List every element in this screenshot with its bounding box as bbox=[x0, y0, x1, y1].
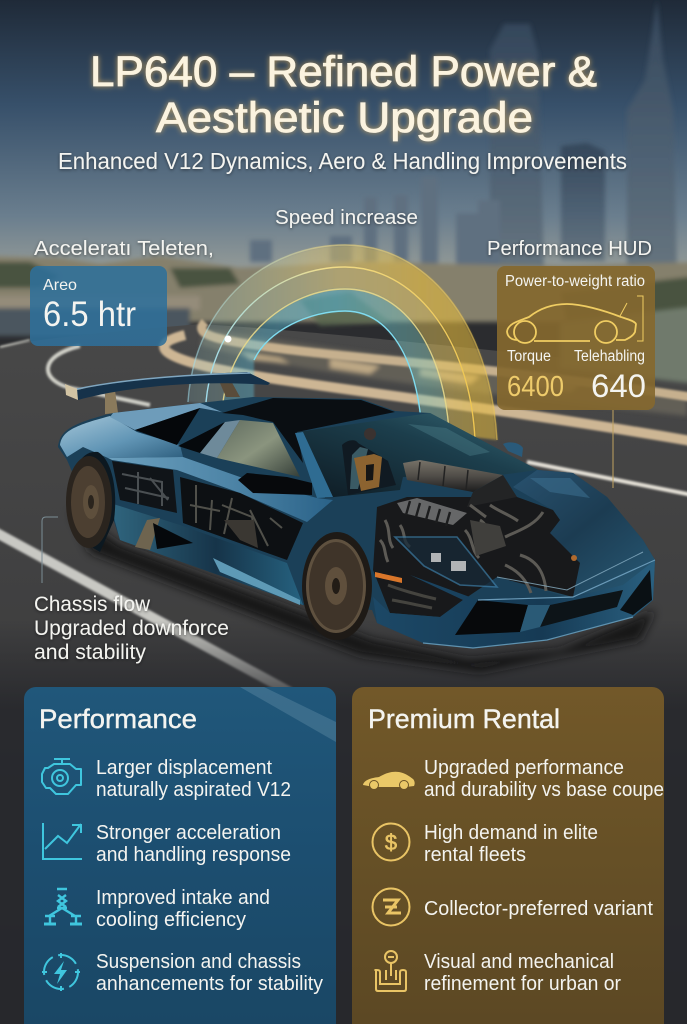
text: and durability vs base coupe bbox=[424, 779, 664, 801]
rear wing bbox=[65, 372, 270, 414]
engine bay bbox=[373, 497, 580, 617]
icon: dollar coin: $ bbox=[385, 830, 397, 855]
front fascia bbox=[373, 552, 655, 648]
icon: collector emblem bbox=[372, 888, 410, 926]
callout bracket bbox=[42, 517, 58, 583]
text: and handling response bbox=[96, 844, 291, 866]
text bbox=[424, 951, 621, 995]
subtitle: Enhanced V12 Dynamics, Aero & Handling Improvements bbox=[58, 148, 627, 174]
icon: rising chart bbox=[43, 823, 82, 859]
hood glass bbox=[497, 470, 655, 597]
A pillar bbox=[295, 432, 333, 498]
aero label: Areo bbox=[43, 277, 77, 294]
text: Stronger acceleration bbox=[96, 822, 281, 844]
outer gold band bbox=[188, 245, 497, 440]
hood highlight bbox=[530, 478, 590, 498]
item: high demand bbox=[372, 822, 598, 866]
torque value: 6400 bbox=[507, 371, 564, 403]
text: cooling efficiency bbox=[96, 909, 246, 931]
upper deck strip bbox=[110, 403, 222, 430]
label: speed increase: Speed increase bbox=[275, 206, 418, 229]
car body base bbox=[58, 397, 655, 648]
panel: performance HUD bbox=[497, 266, 655, 410]
side mirror bbox=[238, 473, 312, 495]
rear wheel bbox=[66, 452, 115, 552]
rear window bbox=[135, 408, 200, 445]
inner cyan band bbox=[223, 289, 449, 430]
text: refinement for urban or bbox=[424, 973, 621, 995]
icon: bolt in ring bbox=[42, 953, 80, 991]
text bbox=[96, 822, 291, 866]
text bbox=[96, 757, 291, 801]
text: Improved intake and bbox=[96, 887, 270, 909]
torque label: Torque bbox=[507, 348, 551, 365]
icon: car bbox=[363, 772, 415, 790]
text: Larger displacement bbox=[96, 757, 272, 779]
text: High demand in elite bbox=[424, 822, 598, 844]
title: LP640 – Refined Power & bbox=[90, 48, 597, 96]
side vent shadow bbox=[153, 523, 193, 549]
car shadow bbox=[70, 510, 655, 672]
icon: dollar coin bbox=[372, 824, 410, 860]
item: stronger acceleration bbox=[43, 822, 291, 866]
side window bbox=[217, 420, 300, 477]
upper side panel bbox=[108, 457, 333, 522]
power value: 640 bbox=[591, 368, 646, 404]
icon: gear shifter bbox=[375, 951, 406, 991]
icon: car outline bbox=[507, 296, 643, 343]
sill highlight bbox=[213, 558, 300, 605]
windshield bbox=[297, 413, 538, 498]
engine details bbox=[375, 460, 577, 608]
driver seat bbox=[342, 428, 396, 495]
title bbox=[90, 48, 597, 142]
text bbox=[96, 951, 323, 995]
front wheel bbox=[302, 532, 372, 640]
text: Upgraded performance bbox=[424, 757, 624, 779]
cutaway mid section bbox=[180, 477, 303, 560]
door pillar bbox=[200, 420, 240, 458]
callout text: Upgraded downforce bbox=[34, 617, 229, 640]
text: rental fleets bbox=[424, 844, 526, 866]
text bbox=[96, 887, 270, 931]
icon: engine bbox=[42, 759, 81, 794]
item: upgraded performance bbox=[363, 757, 664, 801]
item: collector preferred bbox=[372, 888, 653, 926]
label: acceleration telemetry: Acceleratı Teleten, bbox=[34, 238, 214, 260]
item: visual and mechanical bbox=[375, 951, 621, 995]
wing mirror bbox=[503, 442, 523, 457]
panel: premium rental bbox=[352, 687, 664, 1024]
windshield reflection bbox=[408, 424, 490, 456]
HUD leader line bbox=[612, 410, 614, 488]
cutaway rear section bbox=[112, 461, 177, 513]
text bbox=[424, 757, 664, 801]
panel: performance bbox=[24, 687, 336, 1024]
HUD heading: Power-to-weight ratio bbox=[505, 273, 645, 290]
text: naturally aspirated V12 bbox=[96, 779, 291, 801]
quarter window bbox=[178, 422, 225, 453]
callout text: Chassis flow bbox=[34, 593, 151, 616]
speed increase arcs bbox=[188, 245, 497, 440]
performance heading: Performance bbox=[39, 704, 197, 734]
label: performance HUD: Performance HUD bbox=[487, 238, 652, 260]
callout text bbox=[34, 593, 229, 664]
text bbox=[424, 822, 598, 866]
icon: intake manifold bbox=[44, 889, 82, 924]
aero value: 6.5 htr bbox=[43, 295, 136, 334]
chassis details bbox=[122, 472, 282, 548]
car illustration bbox=[58, 372, 655, 672]
text: Suspension and chassis bbox=[96, 951, 301, 973]
item: improved intake bbox=[44, 887, 270, 931]
text: Visual and mechanical bbox=[424, 951, 614, 973]
rear side vent bbox=[135, 518, 160, 550]
title: Aesthetic Upgrade bbox=[156, 94, 533, 142]
item: larger displacement bbox=[42, 757, 291, 801]
middle pale band bbox=[206, 267, 475, 440]
premium rental heading: Premium Rental bbox=[368, 704, 560, 734]
callout: chassis flow bbox=[34, 517, 229, 664]
rear deck highlight bbox=[60, 416, 183, 458]
text: Collector-preferred variant bbox=[424, 898, 653, 920]
telemetry label: Telehabling bbox=[574, 348, 645, 365]
panel stripe reflection bbox=[240, 687, 336, 742]
panel: aero stat bbox=[30, 266, 167, 346]
roof bbox=[222, 398, 395, 463]
lower side panel bbox=[110, 503, 303, 605]
callout text: and stability bbox=[34, 641, 146, 664]
text: anhancements for stability bbox=[96, 973, 323, 995]
item: suspension and chassis bbox=[42, 951, 323, 995]
